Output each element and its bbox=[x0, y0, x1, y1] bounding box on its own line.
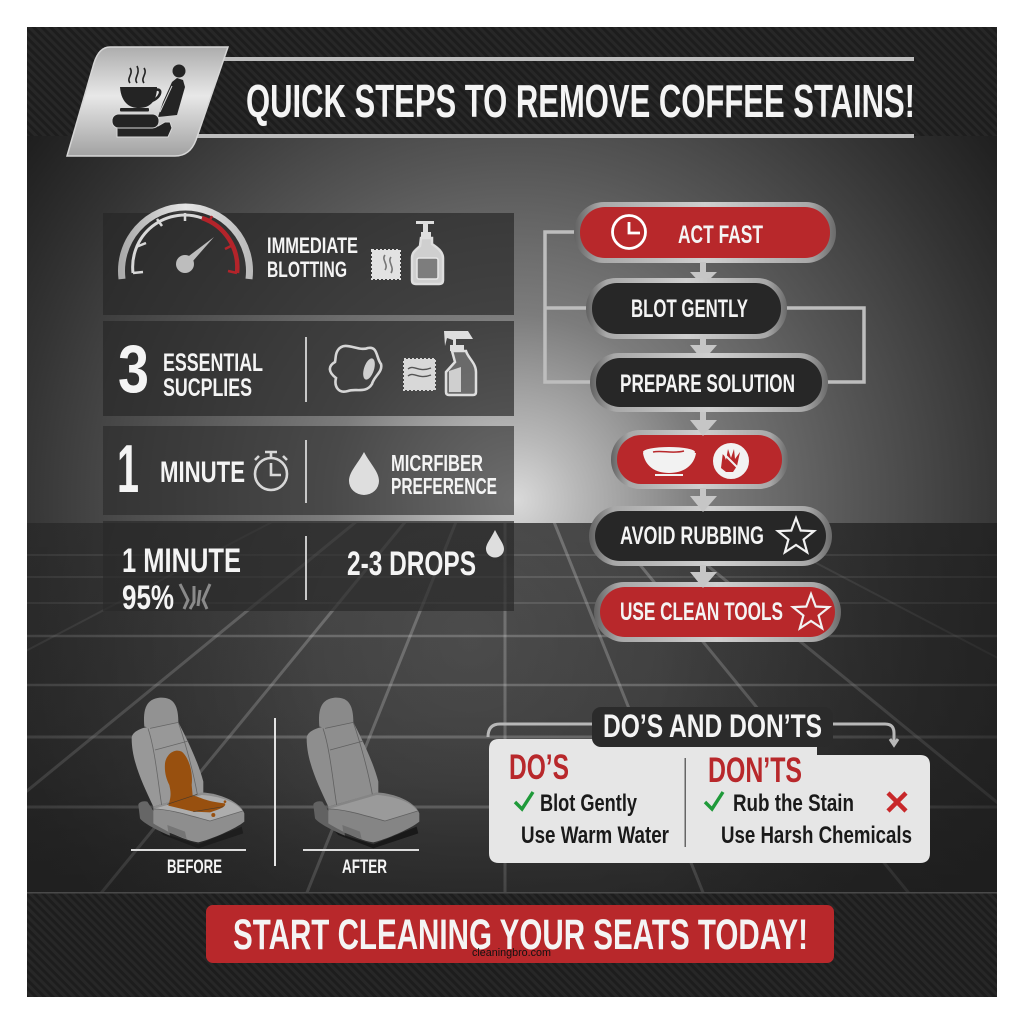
number 1: 1 bbox=[117, 431, 139, 507]
use clean tools label: USE CLEAN TOOLS bbox=[620, 598, 783, 626]
before and after captions bbox=[131, 718, 419, 878]
immediate label: IMMEDIATE bbox=[267, 233, 358, 258]
avoid rubbing label: AVOID RUBBING bbox=[620, 522, 764, 550]
before label: BEFORE bbox=[167, 857, 222, 878]
panel: immediate blotting bbox=[103, 207, 514, 315]
arrow bbox=[690, 338, 717, 361]
icon: speedometer bbox=[122, 207, 250, 279]
icon: star bbox=[778, 518, 814, 552]
blot gently label: BLOT GENTLY bbox=[631, 295, 748, 323]
icon: stain blob bbox=[330, 346, 381, 392]
warm water item: Use Warm Water bbox=[521, 822, 669, 849]
panel: minute, percent and drops bbox=[103, 521, 514, 617]
coffee stain bbox=[165, 751, 225, 812]
call to action banner bbox=[206, 905, 834, 963]
flowchart connectors bbox=[545, 232, 864, 382]
card bbox=[489, 739, 930, 863]
don'ts heading: DON’TS bbox=[708, 751, 802, 790]
arrow bbox=[690, 488, 717, 512]
one minute label: 1 MINUTE bbox=[122, 542, 241, 580]
icon: small drop bbox=[486, 530, 504, 558]
icon: clock bbox=[612, 216, 646, 248]
icon: stopwatch bbox=[255, 452, 287, 490]
icon: spray bottle bbox=[444, 331, 476, 395]
icon: star bbox=[793, 594, 829, 628]
icon: cloth bbox=[372, 250, 400, 279]
minute label: MINUTE bbox=[160, 456, 245, 489]
divider bbox=[684, 758, 686, 847]
header rules bbox=[195, 57, 914, 138]
heading side rails bbox=[488, 724, 898, 745]
after label: AFTER bbox=[342, 857, 387, 878]
do's heading: DO’S bbox=[509, 748, 569, 787]
icon: faded marks bbox=[180, 584, 210, 609]
panel: do's and don'ts bbox=[488, 707, 930, 863]
pill: prepare solution bbox=[590, 353, 828, 412]
pill: avoid rubbing bbox=[589, 506, 832, 566]
pill: use clean tools bbox=[594, 582, 841, 642]
preference label: PREFERENCE bbox=[391, 473, 497, 499]
panel: essential supplies bbox=[103, 321, 514, 416]
seat: after bbox=[307, 698, 419, 848]
harsh chemicals item: Use Harsh Chemicals bbox=[721, 822, 912, 849]
blot gently item: Blot Gently bbox=[540, 790, 637, 817]
watermark: cleaningbro.com bbox=[472, 947, 551, 959]
seat: before bbox=[132, 698, 244, 848]
header icon plate: coffee and car seat bbox=[67, 47, 228, 156]
arrow bbox=[690, 262, 717, 286]
heading text: DO’S AND DON’TS bbox=[603, 708, 822, 744]
icon: water drop bbox=[349, 452, 379, 495]
icon: sponge bbox=[404, 359, 435, 390]
act fast label: ACT FAST bbox=[678, 221, 763, 249]
blotting label: BLOTTING bbox=[267, 257, 347, 282]
supplies label: SUCPLIES bbox=[163, 374, 252, 402]
percent label: 95% bbox=[122, 579, 174, 617]
pill: blot gently bbox=[586, 278, 787, 339]
rub the stain item: Rub the Stain bbox=[733, 790, 854, 817]
icon: cross bbox=[888, 793, 906, 811]
icon: check bbox=[515, 792, 533, 809]
pill: act fast bbox=[574, 202, 836, 263]
divider bbox=[305, 337, 307, 402]
icon: bowl bbox=[643, 447, 696, 476]
drops label: 2-3 DROPS bbox=[347, 545, 476, 583]
divider bbox=[305, 440, 307, 503]
icon: pump bottle bbox=[412, 221, 443, 284]
icon: check bbox=[705, 792, 723, 809]
icon: brush mark bbox=[361, 357, 377, 381]
arrow bbox=[690, 412, 717, 436]
pill: bowl and no touching bbox=[611, 430, 788, 489]
number 3: 3 bbox=[118, 331, 149, 407]
heading tab bbox=[592, 707, 833, 747]
panel: one minute and microfiber bbox=[103, 426, 514, 515]
essential label: ESSENTIAL bbox=[163, 349, 263, 377]
icon: no touching hand bbox=[714, 444, 748, 478]
divider bbox=[305, 536, 307, 600]
microfiber label: MICRFIBER bbox=[391, 450, 483, 476]
arrow bbox=[690, 565, 717, 588]
prepare solution label: PREPARE SOLUTION bbox=[620, 370, 795, 398]
